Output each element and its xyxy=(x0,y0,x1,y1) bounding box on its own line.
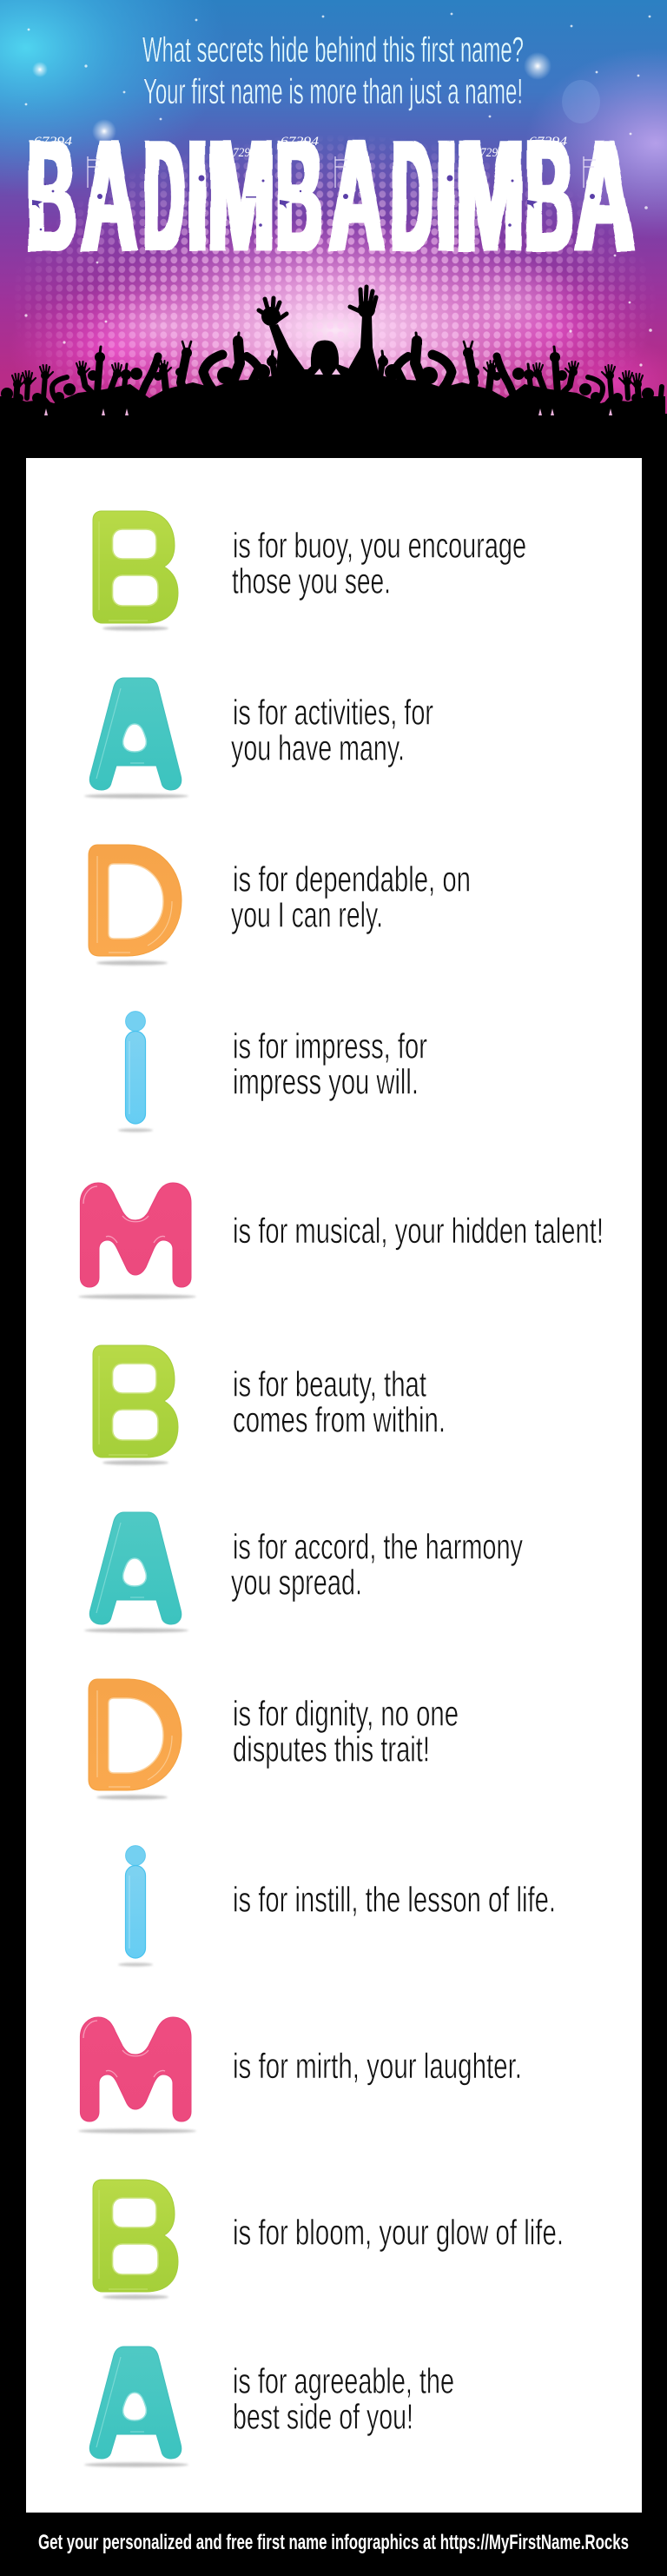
title: BADIMBADIMBA: B xyxy=(26,107,75,284)
title: BADIMBADIMBA: I xyxy=(187,107,208,284)
title: BADIMBADIMBA: M xyxy=(456,107,525,284)
row 1 text xyxy=(232,525,526,601)
row 6 text: comes from within. xyxy=(233,1399,446,1439)
intro heading xyxy=(142,30,524,111)
icon: letter B xyxy=(93,2180,178,2300)
title distress speckles and grunge digits: 67294 xyxy=(34,135,73,149)
row 7 text: is for accord, the harmony xyxy=(233,1526,523,1566)
row 12 text: best side of you! xyxy=(233,2397,413,2437)
icon: letter A xyxy=(84,1512,188,1633)
row 6 text: is for beauty, that xyxy=(233,1364,426,1404)
row 4 text xyxy=(233,1026,427,1102)
row 8 text: is for dignity, no one xyxy=(233,1693,459,1733)
title: BADIMBADIMBA xyxy=(26,107,636,284)
title: BADIMBADIMBA: B xyxy=(276,107,321,284)
icon: letter D xyxy=(89,1679,182,1800)
row 3 text xyxy=(231,859,471,935)
icon: letter D xyxy=(89,845,182,966)
icon: letter B xyxy=(93,1345,178,1465)
row 1 text: those you see. xyxy=(232,561,391,601)
hero background: stage lights xyxy=(0,0,667,414)
icon: letter A xyxy=(84,678,188,799)
title: BADIMBADIMBA: A xyxy=(329,107,385,284)
row 2 text: you have many. xyxy=(231,728,405,768)
body of central figure drawn as solid group xyxy=(259,287,393,415)
title: BADIMBADIMBA: D xyxy=(392,107,433,284)
row 12 text: is for agreeable, the xyxy=(233,2360,454,2400)
title distress speckles and grunge digits xyxy=(32,135,596,231)
title: BADIMBADIMBA: B xyxy=(525,107,572,284)
crowd silhouette xyxy=(0,285,667,458)
row 2 text: is for activities, for xyxy=(233,692,433,732)
row 4 text: is for impress, for xyxy=(233,1026,427,1066)
icon: letter M xyxy=(78,1183,196,1299)
row 3 text: is for dependable, on xyxy=(233,859,471,899)
title: BADIMBADIMBA: I xyxy=(436,107,457,284)
row 3 text: you I can rely. xyxy=(231,895,383,935)
row 2 text xyxy=(231,692,433,768)
title: BADIMBADIMBA: A xyxy=(575,107,634,284)
row 8 text: disputes this trait! xyxy=(233,1730,430,1769)
title: BADIMBADIMBA: D xyxy=(144,107,184,284)
row 1 text: is for buoy, you encourage xyxy=(233,525,526,565)
icon: letter M xyxy=(78,2017,196,2134)
title distress speckles and grunge digits: 67294 xyxy=(281,135,320,149)
icon: letter A xyxy=(84,2347,188,2467)
icon: letter B xyxy=(93,511,178,631)
row 12 text xyxy=(233,2360,454,2437)
row 8 text xyxy=(233,1693,459,1769)
row 6 text xyxy=(233,1364,446,1439)
title distress speckles and grunge digits: 729 xyxy=(233,146,250,160)
row 4 text: impress you will. xyxy=(233,1062,419,1102)
icon: letter i xyxy=(118,1846,153,1966)
row 7 text: you spread. xyxy=(231,1563,362,1603)
panel: white background xyxy=(26,458,642,2513)
row 10 text: is for mirth, your laughter. xyxy=(233,2046,522,2086)
title distress speckles and grunge digits: 729 xyxy=(480,146,498,160)
icon: letter i xyxy=(118,1012,153,1132)
title: BADIMBADIMBA: A xyxy=(82,107,137,284)
title: BADIMBADIMBA: M xyxy=(208,107,274,284)
row 7 text xyxy=(231,1526,523,1603)
title distress speckles and grunge digits: 67294 xyxy=(529,135,568,149)
